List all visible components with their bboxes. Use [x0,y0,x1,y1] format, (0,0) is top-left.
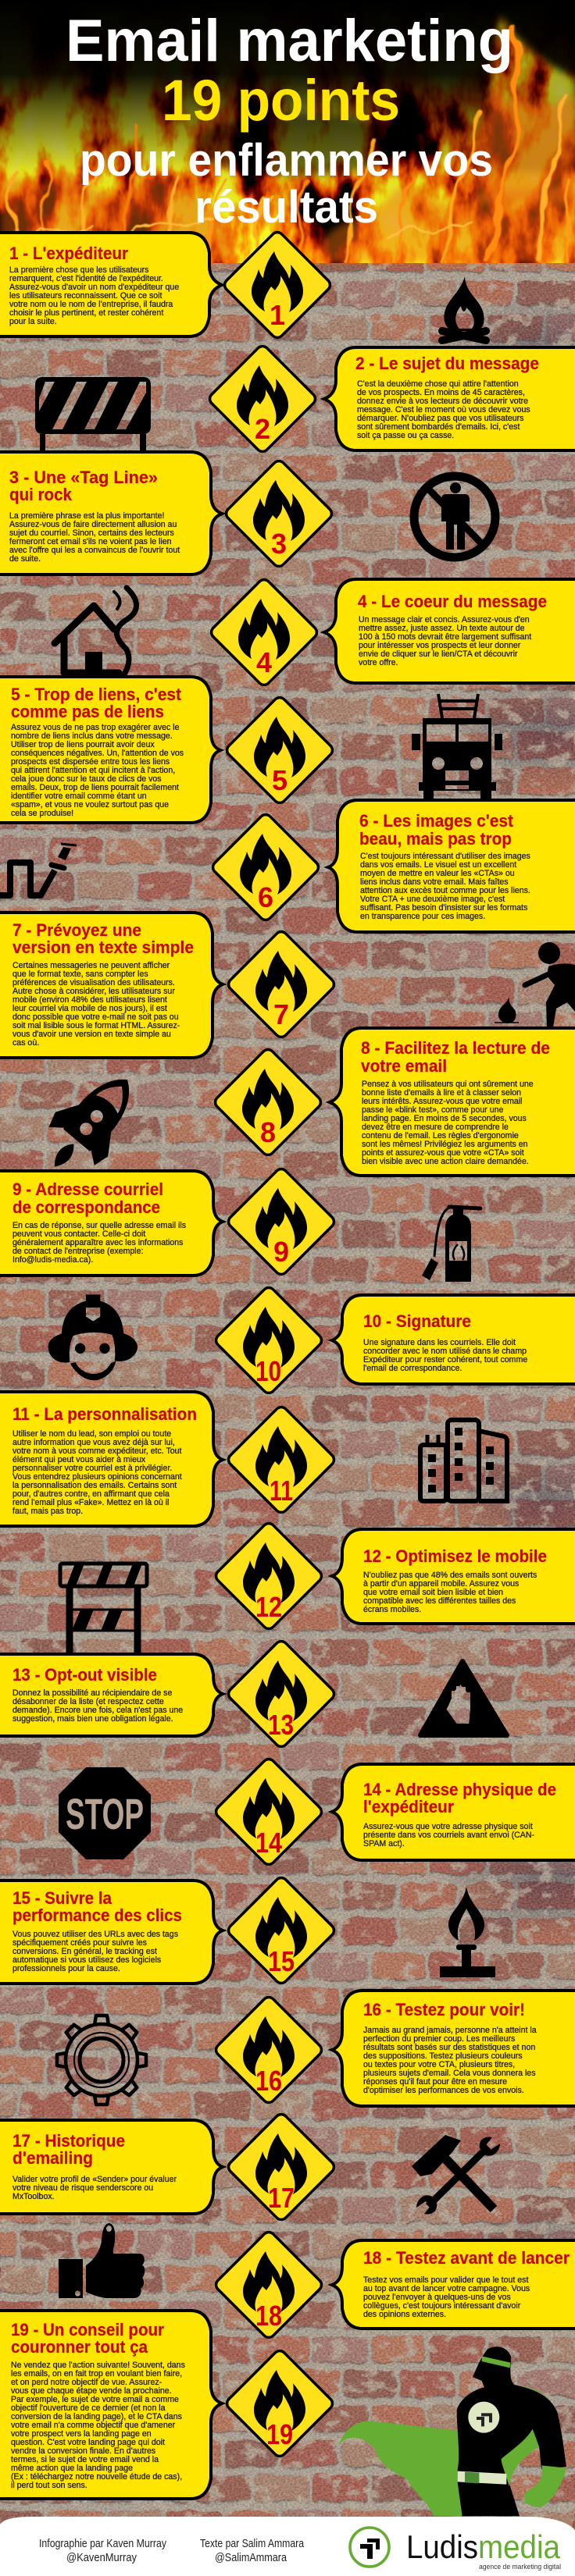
text: point 4: Un message clair et concis. Assurez-vous d'en [359,615,530,624]
badge: flame 7: 7 [273,998,289,1030]
text: point 7: que le format texte, sans compter les [12,970,148,979]
text: point 11: autre information que vous avez déjà sur lui, [12,1438,175,1447]
heading: point 15 [12,1888,182,1925]
text: point 4: votre offre. [359,658,398,667]
heading: point 9 [12,1179,163,1217]
icon: running person and small flame [495,942,575,1027]
heading: point 8: 8 - Facilitez la lecture de [361,1038,550,1058]
illustration: green superhero [338,2347,566,2516]
text: point 11: rend l'email plus «Fake». Mettez en là où il [12,1498,169,1507]
badge: flame 14 [213,1756,324,1867]
text: point 19: votre email n'a comme objectif que d'amener [11,2421,176,2430]
badge: flame 10 [213,1285,324,1396]
panel: point 12 [332,1529,575,1624]
text: point 9: de contact de l'entreprise (exemple: [12,1247,144,1256]
panel: point 4 [324,579,575,683]
panel: point 2 [324,347,575,450]
icon: campfire [442,276,486,340]
credit: text author [200,2537,305,2564]
badge: flame 4: 4 [256,646,272,678]
badge: flame 16 [213,1994,324,2105]
text: point 2: démarquer. N'oubliez pas que vos utilisateurs [357,414,523,423]
panel: point 1 [0,233,222,336]
text: point 6: en transparence pour ces images. [360,912,485,921]
text: point 17: votre niveau de risque senderscore ou [12,2183,153,2193]
heading: point 3: qui rock [9,485,73,504]
badge: flame 16: 16 [255,2065,282,2097]
heading: point 17 [12,2131,125,2168]
icon: fire extinguisher [422,1207,480,1282]
logo: Ludismedia [350,2528,561,2571]
text: point 5: cela se produise! [11,809,73,818]
text: point 16: plusieurs sujets d'email. Cela vous donnera les [363,2069,536,2078]
badge: flame 14: 14 [255,1827,282,1859]
badge: flame 5: 5 [272,764,288,796]
heading: point 11: 11 - La personnalisation [12,1404,197,1424]
text: point 5: qui attirent l'attention et qui incitent à l'action, [11,766,175,775]
text: point 5: emails. Deux, trop de liens pourrait facilement [11,783,179,792]
icon: burning house [55,588,137,676]
text: point 3: La première phrase est la plus importante! [9,511,164,521]
badge: flame 8: 8 [260,1116,276,1148]
title: pour enflammer vos [80,135,493,186]
text: point 8: sont les mêmes! Privilégiez les arguments en [362,1140,528,1149]
text: point 19: Ne vendez que l'action suivante! Souvent, dans [11,2361,185,2370]
heading: point 17: 17 - Historique [12,2131,125,2151]
badge: flame 1 [222,229,333,340]
text: point 14: Assurez-vous que votre adresse physique soit [363,1822,533,1831]
text: point 19: et on perd notre objectif de vue. Assurez- [11,2378,162,2387]
text: point 2: sont sûrement bombardés d'emails. Ici, c'est [357,422,520,432]
text: point 8: passe le «blink test», comme pour une [362,1105,503,1115]
credit: text author: @SalimAmmara [215,2551,288,2564]
text: point 19: il perd tout son sens. [11,2481,88,2490]
text: point 16: perfection du premier coup. Les meilleurs [363,2034,515,2044]
heading: point 6: beau, mais pas trop [359,829,512,849]
text: point 19: conversion de la landing page), et le CTA dans [11,2412,182,2421]
heading: point 18: 18 - Testez avant de lancer [363,2248,570,2268]
text: point 12: écrans mobiles. [363,1605,421,1614]
text: point 6: suffisant. Pas besoin d'insister sur les formats [360,903,527,913]
text: point 16: des suppositions. Testez plusieurs couleurs [363,2051,523,2061]
badge: flame 7 [226,929,337,1040]
text: point 4: mettre assez, juste assez. Un texte autour de [359,624,525,633]
panel: point 16 [332,1991,575,2106]
text: point 3: fermeront cet email s'ils ne voient pas le lien [9,537,172,546]
heading: point 3 [9,468,158,504]
text: point 2: C'est la deuxième chose qui attire l'attention [357,379,519,389]
text: point 19: vendre la conversion finale. En d'autres [11,2446,155,2456]
badge: flame 1: 1 [270,299,285,331]
text: point 1: votre nom ou le nom de l'entreprise, il faudra [9,300,173,309]
heading: point 10: 10 - Signature [363,1311,471,1331]
heading: point 5: comme pas de liens [11,702,164,721]
text: point 16: réponses qu'il faut pour être en mesure [363,2077,507,2087]
text: point 6: moyen de mettre en valeur les «CTAs» ou [360,869,515,878]
text: point 6: Votre CTA + une deuxième image, c'est [360,895,505,904]
title: résultats [195,182,378,233]
text: point 7: préférences de visualisation des utilisateurs. [12,978,175,987]
text: point 9: Info@ludis-media.ca). [12,1255,93,1265]
title: 19 points [162,68,400,133]
text: point 9: En cas de réponse, sur quelle adresse email ils [12,1221,186,1230]
badge: flame 6: 6 [258,881,273,913]
text: point 8: contenu de l'email. Les règles d'ergonomie [362,1131,519,1140]
icon: no person sign [414,476,495,557]
panel: point 10 [332,1295,575,1384]
text: point 6: C'est toujours intéressant d'utiliser des images [360,852,530,861]
icon: buildings [420,1420,507,1501]
panel: point 8 [330,1028,575,1176]
text: point 11: votre nom à vous comme expéditeur, etc. Tout [12,1446,182,1456]
icon: fire truck [412,694,502,799]
heading: point 8: votre email [361,1056,447,1076]
text: point 11: la personnalisation des emails. Certains sont [12,1481,177,1490]
badge: flame 15 [226,1875,337,1986]
badge: flame 18 [213,2229,324,2340]
badge: flame 10: 10 [255,1355,281,1387]
text: point 9: généralement apparaître avec les informations [12,1238,183,1247]
text: point 5: prospects est dispersée entre tous les liens [11,757,170,767]
text: point 17: MxToolbox. [12,2192,55,2201]
text: point 7: leur courriel via mobile de nos jours), il est [12,1004,167,1013]
badge: flame 11: 11 [270,1475,293,1507]
heading: point 9: de correspondance [12,1197,160,1217]
title: Email marketing [66,8,513,74]
text: point 4: 100 à 150 mots devrait être largement suffisant [359,632,531,642]
text: point 6: dans vos emails. Le visuel est un excellent [360,860,516,870]
text: point 2: message. C'est le moment où vous devez vous [357,405,530,415]
heading: point 4: 4 - Le coeur du message [358,592,547,611]
heading: point 1: 1 - L'expéditeur [9,244,128,263]
text: point 13: suggestion, mais bien une obligation légale. [12,1714,173,1724]
heading: point 19 [11,2320,164,2357]
text: point 13: Donnez la possibilité au récipiendaire de se [12,1688,172,1698]
text: point 15: spécifiquement créés pour suivre les [12,1938,147,1948]
text: point 19: objectif l'ouverture de ce dernier (et non la [11,2403,166,2413]
text: point 7: vous d'avoir une version en texte simple au [12,1030,171,1039]
text: point 10: l'email de correspondance. [363,1364,462,1373]
text: point 7: Autre chose à considérer, les utilisateurs sur [12,987,175,996]
badge: flame 3: 3 [271,528,287,560]
icon: road barrier [35,377,151,452]
icon: bunsen burner [440,1887,495,1977]
text: point 19: question. C'est votre landing page qui doit [11,2438,165,2447]
credit: infographic author: @KavenMurray [66,2551,137,2564]
text: point 10: Expéditeur pour rester cohérent, tout comme [363,1355,527,1364]
text: point 12: à partir d'un appareil mobile. Assurez vous [363,1579,519,1589]
text: point 15: professionnels pour la cause. [12,1964,120,1973]
text: point 11: élément qui peut vous aider à mieux [12,1455,146,1464]
heading: point 14 [363,1780,556,1816]
text: point 3: sujet du courriel. Sinon, certains des lecteurs [9,528,174,538]
logo: Ludismedia: media [478,2528,561,2565]
badge: flame 9: 9 [273,1236,289,1268]
text: point 13: demande). Encore une fois, cela n'est pas une [12,1706,183,1715]
text: point 2: de vos prospects. En moins de 45 caractères, [357,388,525,397]
footer band [0,2517,575,2576]
text: point 8: points et assurez-vous que votre «CTA» soit [362,1148,524,1158]
text: point 11: faut, mais pas trop. [12,1507,83,1516]
panel: point 14 [332,1764,575,1860]
heading: point 9: 9 - Adresse courriel [12,1179,163,1199]
heading: point 6 [359,811,514,849]
text: point 4: envie de cliquer sur le lien/CTA et découvrir [359,649,518,659]
heading: point 13: 13 - Opt-out visible [12,1665,157,1685]
text: point 3: de suite. [9,554,41,564]
logo: Ludismedia: agence de marketing digital [479,2563,561,2571]
text: point 19: même action que la landing page [11,2464,133,2473]
text: point 1: les utilisateurs reconnaissent. Que ce soit [9,291,162,301]
badge: flame 13 [226,1638,337,1749]
text: point 3: avec l'offre qui les a convaincus de l'ouvrir tout [9,546,180,555]
text: point 5: conséquences négatives. Un, l'attention de vos [11,749,184,758]
text: point 15: automatique si vous utilisez des logiciels [12,1955,161,1965]
heading: point 5: 5 - Trop de liens, c'est [11,685,182,704]
text: point 1: pour la suite. [9,317,57,326]
text: point 8: Pensez à vos utilisateurs qui ont sûrement une [362,1080,534,1089]
icon: rocket [28,1058,154,1189]
text: point 7: cas où. [12,1038,39,1048]
text: point 16: résultats sont basés sur des statistiques et non [363,2043,535,2052]
icon: roadwork barrier [60,1564,147,1653]
badge: flame 12 [213,1521,324,1631]
icon: warning triangle with hand [420,1661,507,1735]
text: point 18: pouvez l'envoyer à quelques-uns de vos [363,2293,511,2302]
heading: point 17: d'emailing [12,2148,93,2168]
panel: point 5 [0,677,220,823]
heading: point 15: 15 - Suivre la [12,1888,112,1908]
text: point 1: remarquent, c'est l'identité de l'expéditeur. [9,274,163,283]
text: point 16: d'optimiser les performances de vos envois. [363,2086,524,2095]
badge: flame 2: 2 [255,413,270,445]
text: point 14: SPAM act). [363,1839,405,1848]
credit: infographic author [39,2537,166,2564]
text: point 7: mobile (environ 48% des utilisateurs lisent [12,995,167,1005]
badge: flame 2 [207,343,318,454]
text: point 1: Assurez-vous d'avoir un nom d'expéditeur que [9,283,179,292]
panel: point 15 [0,1880,223,1984]
heading: point 15: performance des clics [12,1905,182,1925]
heading: point 7: version en texte simple [12,938,194,957]
title [66,8,513,233]
heading: point 12: 12 - Optimisez le mobile [363,1546,547,1566]
panel: point 3 [0,452,222,575]
text: point 11: personnaliser votre courriel est à privilégier. [12,1464,172,1473]
badge: flame 3 [223,458,334,569]
text: point 7: soit mal lisible sous le format HTML. Assurez- [12,1021,180,1030]
text: point 9: peuvent vous contacter. Celle-ci doit [12,1229,145,1239]
badge: flame 18: 18 [255,2300,282,2332]
badge: flame 9 [226,1166,337,1277]
text: point 1: La première chose que les utilisateurs [9,265,148,275]
text: point 18: des opinions externes. [363,2310,446,2319]
text: point 10: Une signature dans les courriels. Elle doit [363,1338,516,1347]
badge: flame 11 [226,1404,337,1515]
panel: point 11 [0,1392,223,1526]
text: point 6: attention aux excès tout comme pour les liens. [360,886,530,895]
icon: thumbs up [59,2223,145,2298]
text: point 4: pour intéresser vos prospects et leur donner [359,641,521,650]
text: point 19: termes, si le sujet de votre email vend la [11,2455,159,2464]
text: point 10: concorder avec le nom utilisé dans le champ [363,1347,527,1356]
badge: flame 13: 13 [268,1709,294,1741]
text: point 8: devez être en mesure de comprendre le [362,1123,509,1132]
text: point 11: pour, d'autres contre, en affirmant que cela [12,1489,170,1499]
text: point 5: «spam», et vous ne voulez surtout pas que [11,800,169,809]
text: point 16: Jamais au grand jamais, personne n'a atteint la [363,2026,537,2035]
credit: infographic author: Infographie par Kaven Murray [39,2537,166,2550]
heading: point 7: 7 - Prévoyez une [12,920,141,940]
text: point 5: nombre de liens inclus dans votre message. [11,731,173,741]
heading: point 3: 3 - Une «Tag Line» [9,468,158,487]
text: point 19: vous que chaque étape vende la prochaine. [11,2386,172,2396]
text: point 8: bien visible avec une action claire demandée. [362,1157,529,1166]
text: point 13: désabonner de la liste (et respectez cette [12,1697,164,1706]
panel: point 13 [0,1654,223,1736]
text: point 7: donc possible que votre e-mail ne soit pas ou [12,1012,179,1022]
fire background [0,0,575,263]
text: point 11: Vous entendrez plusieurs opinions concernant [12,1472,182,1482]
logo: Ludismedia: Ludis [406,2528,478,2565]
badge: flame 12: 12 [255,1591,282,1623]
icon: firefighter face [48,1294,138,1380]
panel: point 19 [0,2311,222,2499]
panel: point 9 [0,1171,223,1276]
panel: point 6 [328,800,575,932]
heading: point 5 [11,685,182,721]
text: point 15: conversions. En général, le tracking est [12,1947,157,1956]
badge: flame 4 [209,577,320,688]
panel: point 17 [0,2120,223,2214]
heading: point 7 [12,920,194,957]
panel: point 7 [0,913,223,1058]
text: point 5: Utiliser trop de liens pourrait avoir deux [11,740,155,749]
text: point 3: Assurez-vous de faire directement allusion au [9,520,177,529]
text: point 7: Certaines messageries ne peuvent afficher [12,961,170,970]
text: point 18: Testez vos emails pour valider que le tout est [363,2275,528,2285]
heading: point 19: 19 - Un conseil pour [11,2320,164,2339]
icon: stop sign [59,1767,151,1859]
heading: point 6: 6 - Les images c'est [359,811,514,831]
badge: flame 17 [226,2112,337,2222]
text: point 2: soit ça passe ou ça casse. [357,431,454,440]
text: point 19: les emails, on en fait trop en voulant bien faire, [11,2369,182,2379]
text: point 12: que votre email soit bien lisible et bien [363,1588,503,1597]
text: point 16: ou textes pour votre CTA, plusieurs titres, [363,2060,515,2069]
badge: flame 19 [224,2348,335,2459]
text: point 18: collègues, c'est toujours intéressant d'avoir [363,2301,521,2311]
text: point 5: identifier votre email comme étant un [11,792,147,801]
text: point 19: (Ex : téléchargez notre nouvelle étude de cas), [11,2472,182,2482]
badge: flame 17: 17 [268,2182,295,2214]
text: point 19: votre prospect vers la landing page en [11,2429,152,2439]
icon: hammer and wrench [412,2135,500,2214]
text: point 6: liens inclus dans votre email. Mais faîtes [360,877,509,887]
icon: gear [57,2016,146,2105]
text: point 11: Utiliser le nom du lead, son emploi ou toute [12,1429,171,1439]
heading: point 14: 14 - Adresse physique de [363,1780,556,1799]
badge: flame 19: 19 [266,2418,293,2450]
badge: flame 6 [210,812,321,923]
text: point 14: présente dans vos courriels avant envoi (CAN- [363,1831,535,1840]
text: point 12: compatible avec les différentes tailles des [363,1596,516,1606]
panel: point 18 [332,2240,575,2329]
text: point 2: donnez envie à vos lecteurs de découvrir votre [357,397,528,406]
text: point 19: Par exemple, le sujet de votre email a comme [11,2395,179,2404]
text: point 12: N'oubliez pas que 48% des emails sont ouverts [363,1571,537,1580]
badge: flame 8 [212,1047,323,1158]
text: point 5: Assurez vous de ne pas trop exagérer avec le [11,723,180,732]
badge: flame 5 [224,695,335,806]
text: point 17: Valider votre profil de «Sender» pour évaluer [12,2175,177,2184]
credit: text author: Texte par Salim Ammara [200,2537,305,2550]
heading: point 14: l'expéditeur [363,1797,454,1816]
text: point 1: choisir le plus pertinent, et rester cohérent [9,308,163,318]
text: point 15: Vous pouvez utiliser des URLs avec des tags [12,1930,178,1939]
badge: flame 15: 15 [268,1945,295,1977]
heading: point 2: 2 - Le sujet du message [355,354,539,373]
icon: stop sign: STOP [66,1789,144,1838]
text: point 18: au top avant de lancer votre campagne. Vous [363,2284,530,2293]
text: point 5: cela joue donc sur le taux de clics de vos [11,774,162,784]
text: point 8: bonne liste d'emails à lire et à classer selon [362,1088,521,1098]
text: point 8: landing page. En moins de 5 secondes, vous [362,1114,527,1123]
icon: fire hose [0,844,77,895]
heading: point 8 [361,1038,550,1076]
heading: point 19: couronner tout ça [11,2337,148,2357]
text: point 8: leurs intérêts. Assurez-vous que votre email [362,1097,522,1106]
heading: point 16: 16 - Testez pour voir! [363,2000,525,2019]
